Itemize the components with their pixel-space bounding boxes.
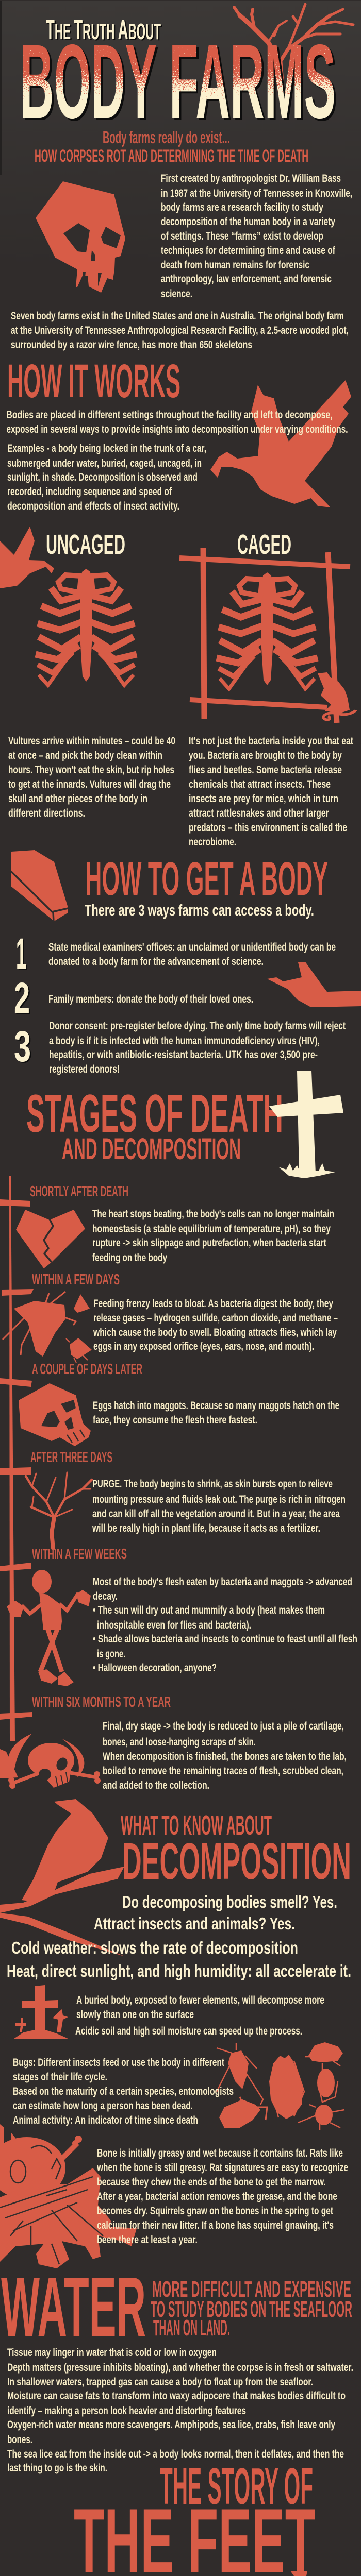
icon: zombie [7,1570,91,1686]
text: within six months to a year: and added to the collection. [103,1780,209,1791]
text: within a few weeks [93,1576,357,1674]
text: way 1: donated to a body farm for the advancement of science. [48,956,264,968]
text: vultures: skull and other pieces of the body in [8,793,147,805]
text: shortly after death [92,1208,334,1264]
text: within a few weeks: is gone. [97,1648,125,1660]
text: decomposition in water [7,2347,353,2474]
text: a couple of days later [93,1400,339,1426]
icon: large skull [36,181,125,293]
text: way 1 [48,941,336,968]
text: within six months to a year: bones, and loose-hanging scraps of skin. [103,1736,256,1748]
text: decomposition in water: Tissue may linger in water that is cold or low in oxygen [7,2347,217,2359]
stage label: within a few days: WITHIN A FEW DAYS [32,1272,120,1288]
icon: zombie hand [267,962,361,1007]
infographic canvas: WATER [1,2260,146,2354]
text: bone scavenging: been there at least a year. [97,2234,198,2246]
paragraph: where body farms exist [11,310,349,351]
text: vultures: hours. They won't eat the skin, but rip holes [8,764,174,776]
text: vultures: Vultures arrive within minutes – could be 40 [8,735,175,747]
subtitle [35,128,308,166]
text: within a few weeks: inhospitable even for flies and bacteria). [97,1619,251,1631]
icon: cage frame [179,548,350,723]
number 2: 2 [14,974,30,1022]
infographic canvas: 1 [16,929,26,978]
text: within a few weeks: • Halloween decoration, anyone? [93,1662,217,1674]
icon: pile of bones [0,2124,137,2268]
how it works text: Examples - a body being locked in the trunk of a car, [7,443,206,454]
text: decomposition in water: identify – making a person look heavier and distorting features [7,2405,246,2417]
icon: uncaged ribcage [36,569,137,685]
how it works text [6,409,348,512]
text: way 3 [49,1020,346,1075]
text: bugs and animal activity [13,2057,234,2126]
text: bone scavenging [96,2147,348,2246]
icon: coffin [11,850,68,922]
icon: large vulture [210,380,351,507]
how it works text: decomposition and effects of insect activity. [7,500,179,512]
icon: tilted skull [19,1383,91,1446]
label: uncaged: UNCAGED [46,529,125,560]
text: bugs and animal activity: stages of their life cycle. [13,2071,107,2083]
icon: bare tree behind title [234,4,353,88]
number 3: 3 [14,1022,31,1071]
icon: flies and beetle [3,1292,92,1363]
how it works text: submerged under water, buried, caged, uncaged, in [7,457,202,469]
icon: grave crosses [14,1985,68,2039]
text: way 3: registered donors! [49,1063,120,1075]
icon: cream cross [269,1071,343,1178]
text: within a few weeks: decay. [93,1590,118,1602]
decomposition facts: Attract insects and animals? Yes. [94,1914,295,1933]
icon: broken heart [16,1210,85,1268]
intro paragraph [161,173,352,300]
text: decomposition in water: bones. [7,2434,32,2446]
icon: dead tree [26,1472,92,1548]
title: Body Farms: BODY [20,23,157,141]
decomposition facts [7,1892,351,1980]
paragraph: where body farms exist: surrounded by a razor wire fence, has more than 650 skeletons [11,339,252,351]
text: bugs and animal activity: Animal activity: An indicator of time since death [13,2114,198,2126]
text: a couple of days later: face, they consume the flesh there fastest. [93,1414,257,1426]
intro paragraph: death from human remains for forensic [161,259,309,271]
timeline post [0,1176,34,1741]
text: bugs and animal activity: can estimate how long a person has been dead. [13,2100,193,2112]
text: bugs and animal activity: Based on the maturity of a certain species, entomologists [13,2086,234,2097]
icon: beetles [217,2042,344,2130]
text: after three days [92,1478,346,1534]
text: vultures: to get at the innards. Vultures will drag the [8,778,171,790]
text: vultures [8,735,175,819]
text: decomposition in water: last thing to go is the skin. [7,2462,107,2474]
text: vultures: at once – and pick the body clean within [8,750,162,761]
icon: crow on branch [0,1799,124,1956]
text: way 2: Family members: donate the body of their loved ones. [48,993,253,1005]
how it works text: sunlight, in shade. Decomposition is observed and [7,471,198,483]
text: buried bodies: slowly than one on the surface [76,2009,194,2021]
icon: foot bones [182,2571,322,2576]
text: bacteria and necrobiome: necrobiome. [189,836,236,848]
icon: caged ribcage [217,572,318,689]
subtitle: Body farms really do exist... [103,128,230,147]
text: buried bodies [75,1994,324,2037]
text: bugs and animal activity: Bugs: Different insects feed or use the body in different [13,2057,224,2069]
subheading: water is harder to study: THAN ON LAND. [153,2315,230,2341]
stage label: shortly after death: SHORTLY AFTER DEATH [30,1183,128,1200]
intro paragraph: science. [161,288,192,300]
label: caged: CAGED [237,529,291,560]
title: The Truth About: THE TRUTH ABOUT [46,14,161,45]
stage label: a couple of days later: A COUPLE OF DAYS LATER [32,1361,142,1378]
text: bacteria and necrobiome [189,735,353,848]
text: within six months to a year [103,1720,347,1791]
icon: rat [318,672,356,720]
stage label: after three days: AFTER THREE DAYS [30,1449,112,1466]
subheading: water is harder to study [151,2277,352,2341]
text: within a few days [93,1298,338,1352]
text: vultures: different directions. [8,807,85,819]
how it works text: recorded, including sequence and speed of [7,486,172,498]
icon: skull and crossbones with horns [0,1734,101,1789]
text: shortly after death: feeding on the body [92,1252,167,1264]
icon: small vulture [0,527,54,588]
stage label: within six months to a year: WITHIN SIX MONTHS TO A YEAR [32,1694,171,1710]
stage label: within a few weeks: WITHIN A FEW WEEKS [32,1546,127,1563]
